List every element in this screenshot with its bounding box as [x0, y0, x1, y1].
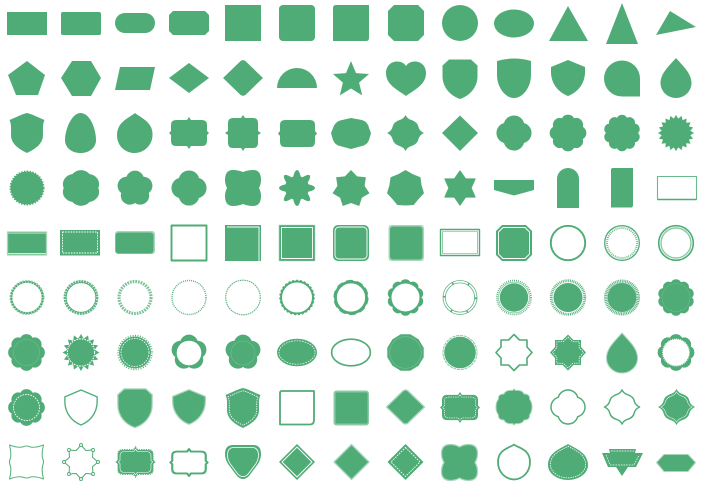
rounded square inner rule — [333, 225, 369, 261]
scalloped six lobes — [550, 115, 586, 151]
chamfered shield — [442, 60, 478, 99]
pennant badge — [602, 449, 643, 476]
rectangle dashed inner — [60, 230, 100, 256]
rounded triangle — [225, 445, 261, 479]
quatrefoil outline — [551, 390, 585, 424]
dotted seal — [118, 336, 152, 370]
eight petal flower — [279, 170, 315, 206]
wavy frame — [10, 445, 44, 479]
row 8 — [8, 388, 695, 428]
lobed ring — [334, 280, 368, 314]
petal filled — [226, 335, 260, 369]
faceted plaque — [331, 118, 371, 149]
eight point star outline — [496, 334, 532, 370]
diamond white rule — [279, 444, 315, 480]
star — [333, 61, 369, 95]
pointed round — [117, 113, 153, 153]
oval dashed — [277, 339, 317, 366]
scallop with faint ring — [658, 279, 694, 316]
plaque dotted — [116, 447, 155, 477]
rounded square light border — [388, 225, 424, 261]
double ring — [659, 226, 693, 260]
filled circle dotted border — [497, 280, 531, 314]
row 6 — [10, 279, 694, 316]
dodecagon — [387, 334, 424, 371]
square with two rounded corners — [333, 5, 369, 41]
square — [225, 5, 261, 41]
rectangle — [7, 12, 47, 35]
heart — [386, 62, 426, 96]
quatrefoil — [496, 115, 532, 151]
double outline rectangle — [440, 230, 480, 256]
square light border — [334, 390, 369, 426]
arch — [557, 168, 579, 208]
toothed circle — [10, 171, 44, 205]
row 9 — [10, 444, 696, 480]
ring — [551, 226, 585, 260]
seven point star — [332, 170, 370, 206]
four lobe clover — [171, 170, 207, 206]
ornate shield — [10, 113, 44, 153]
octagon — [388, 5, 424, 41]
scallop faint ring — [8, 334, 45, 371]
egg — [65, 113, 96, 153]
circle light ring — [443, 336, 477, 370]
outline square — [172, 226, 206, 260]
rounded square — [279, 5, 315, 41]
row 3 — [10, 113, 694, 153]
five petal flower — [118, 171, 152, 205]
scalloped ten lobes — [604, 115, 640, 151]
semicircle — [277, 68, 317, 88]
octagon inner rule — [496, 225, 532, 261]
hexagon — [61, 61, 101, 96]
rounded rectangle — [61, 12, 101, 35]
thin double ring with nodes — [443, 280, 477, 314]
square inner rule — [279, 225, 315, 261]
tall triangle — [606, 3, 638, 44]
plaque outline — [170, 449, 208, 476]
curved top shield — [497, 58, 531, 98]
plaque square — [225, 115, 261, 151]
dotted ring — [172, 280, 206, 314]
pill — [115, 13, 155, 33]
beaded ring two — [65, 282, 97, 314]
bulb with dashed ring — [548, 444, 588, 480]
plaque wide — [169, 117, 209, 149]
pointed shield — [551, 60, 585, 96]
scalloped ring — [388, 279, 423, 316]
starburst — [658, 115, 694, 151]
tilted triangle — [656, 11, 696, 35]
ring dotted inner — [605, 226, 639, 260]
equilateral triangle — [549, 6, 588, 41]
shield outline — [65, 390, 97, 425]
pentagon — [8, 61, 45, 95]
hexagonal plaque — [656, 454, 696, 472]
six point star — [445, 171, 475, 205]
teardrop corner — [604, 60, 640, 96]
dotted star frame — [62, 444, 100, 480]
fine ring — [226, 280, 260, 315]
scalloped diamond — [387, 115, 424, 151]
pointed ring — [498, 444, 530, 480]
ellipse — [494, 10, 534, 38]
scallop dashed ring — [8, 389, 45, 426]
six lobe flower — [63, 170, 99, 206]
diamond light border — [334, 444, 369, 480]
plain diamond — [442, 116, 478, 151]
ornate shield dashed — [226, 388, 260, 428]
drop with border — [606, 333, 638, 373]
curvy plaque light ring — [496, 389, 532, 425]
outline rectangle — [658, 176, 696, 200]
row 5 — [8, 225, 693, 261]
rounded diamond light border — [386, 390, 424, 424]
chamfered rectangle — [169, 11, 209, 35]
beaded ring — [10, 280, 44, 314]
row 4 — [10, 168, 697, 208]
rectangle with inner rules — [8, 232, 46, 255]
heptagon — [387, 170, 424, 206]
tall rectangle — [611, 168, 633, 208]
plaque side nubs — [278, 120, 317, 147]
cushion — [225, 170, 261, 206]
beaded ring light — [119, 282, 151, 314]
row 7 — [8, 333, 694, 373]
lobed ring thick — [658, 334, 694, 371]
eight point star dashed — [550, 334, 586, 370]
rounded square outline — [280, 391, 314, 424]
diamond dotted — [388, 444, 424, 480]
pointed shield light border — [173, 390, 205, 424]
petal ring — [172, 335, 206, 369]
chamfered shield light border — [118, 389, 152, 428]
rounded diamond — [223, 60, 263, 96]
circle — [442, 5, 478, 41]
diamond — [169, 63, 209, 93]
row 1 — [7, 3, 696, 44]
rounded rectangle offset border — [115, 231, 155, 254]
parallelogram — [115, 67, 155, 90]
toothed ring — [280, 280, 314, 315]
plaque dashed — [440, 392, 480, 423]
scalloped diamond filled — [658, 389, 695, 425]
filled circle fine border — [606, 281, 638, 314]
scalloped diamond outline — [604, 390, 640, 424]
oval outline — [332, 339, 370, 366]
square corner rule — [225, 225, 261, 261]
row 2 — [8, 58, 692, 99]
water drop — [660, 58, 692, 98]
cushion light ring — [442, 444, 478, 480]
filled circle ribbed border — [551, 281, 585, 314]
spiked seal — [62, 334, 100, 371]
banner — [494, 180, 534, 196]
